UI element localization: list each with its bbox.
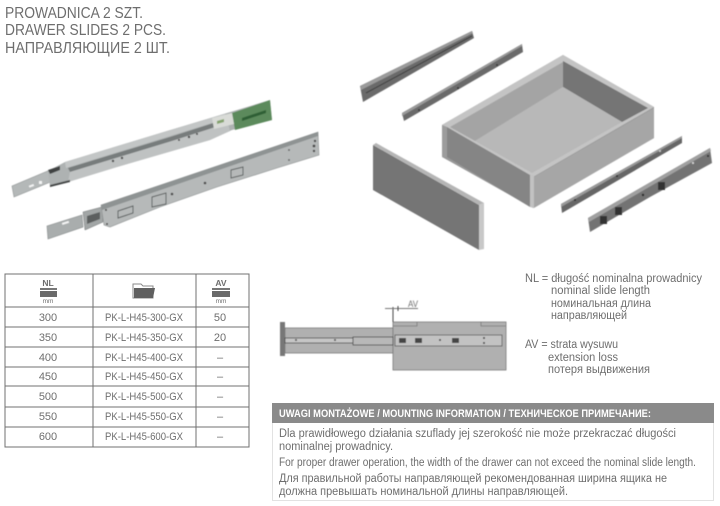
header: AV: mm [216,298,226,305]
legend: NL and AV definitions: AV = strata wysuwu [525,339,618,351]
panel text: Для правильной работы направляющей рекомендованная ширина ящика не [279,473,667,485]
table rows: PK-L-H45-500-GX [105,391,184,403]
table rows [39,312,226,443]
rail: rear-left outer [360,31,474,102]
table rows: – [217,352,224,364]
legend: NL and AV definitions: направляющей [551,310,627,322]
rail: front-right outer [588,148,712,232]
table rows: 300 [39,312,57,324]
legend: NL and AV definitions: nominal slide length [551,285,650,297]
table rows: PK-L-H45-450-GX [105,371,184,383]
table rows: 400 [39,352,57,364]
table rows: – [217,391,224,403]
table rows: PK-L-H45-400-GX [105,352,184,364]
product photo: two drawer slides [12,100,319,239]
table rows: PK-L-H45-550-GX [105,411,184,423]
table rows: 50 [214,312,226,324]
header: folder icon [133,284,155,298]
title: DRAWER SLIDES 2 PCS. [5,22,166,39]
title [5,5,170,57]
panel header [272,403,714,423]
table rows: – [217,371,224,383]
header: AV [212,278,230,305]
table rows: 500 [39,391,57,403]
table rows: PK-L-H45-300-GX [105,312,184,324]
panel header: UWAGI MONTAŻOWE / MOUNTING INFORMATION / ТЕХНИЧЕСКОЕ ПРИМЕЧАНИЕ: [279,407,651,420]
legend: NL and AV definitions [525,273,702,376]
header: NL: mm [43,298,53,305]
legend: NL and AV definitions: NL = długość nominalna prowadnicy [525,273,702,285]
rail: front-right inner [561,136,682,213]
spec table [5,274,249,447]
table rows: 550 [39,411,57,423]
table rows: PK-L-H45-350-GX [105,332,184,344]
table rows: – [217,411,224,423]
header: NL: NL [42,278,54,288]
panel text [279,428,696,498]
panel text: Dla prawidłowego działania szuflady jej szerokość nie może przekraczać długości [279,428,676,440]
title: НАПРАВЛЯЮЩИЕ 2 ШТ. [5,40,170,57]
table rows: PK-L-H45-600-GX [105,431,184,443]
panel: mounting information [272,403,714,500]
exploded drawer assembly drawing [360,31,712,250]
drawer box [442,55,654,208]
panel text: должна превышать номинальной длины направляющей. [279,486,568,498]
slide: lower with brackets [47,132,319,239]
header: NL [40,278,57,305]
title: PROWADNICA 2 SZT. [5,5,143,22]
drawer front panel [373,143,484,250]
header: AV: AV [215,278,227,288]
table rows: 350 [39,332,57,344]
rail: rear-left inner [402,44,523,121]
panel text: nominalnej prowadnicy. [279,441,393,453]
table rows: 20 [214,332,226,344]
table rows: 600 [39,431,57,443]
AV side-view diagram [280,299,506,370]
legend: NL and AV definitions: номинальная длина [551,298,652,310]
table rows: 450 [39,371,57,383]
legend: NL and AV definitions: потеря выдвижения [548,364,650,376]
legend: NL and AV definitions: extension loss [548,352,618,364]
table rows: – [217,431,224,443]
slide: upper with green catch [12,100,272,197]
table grid [5,274,249,447]
AV side-view diagram: AV [408,299,418,309]
